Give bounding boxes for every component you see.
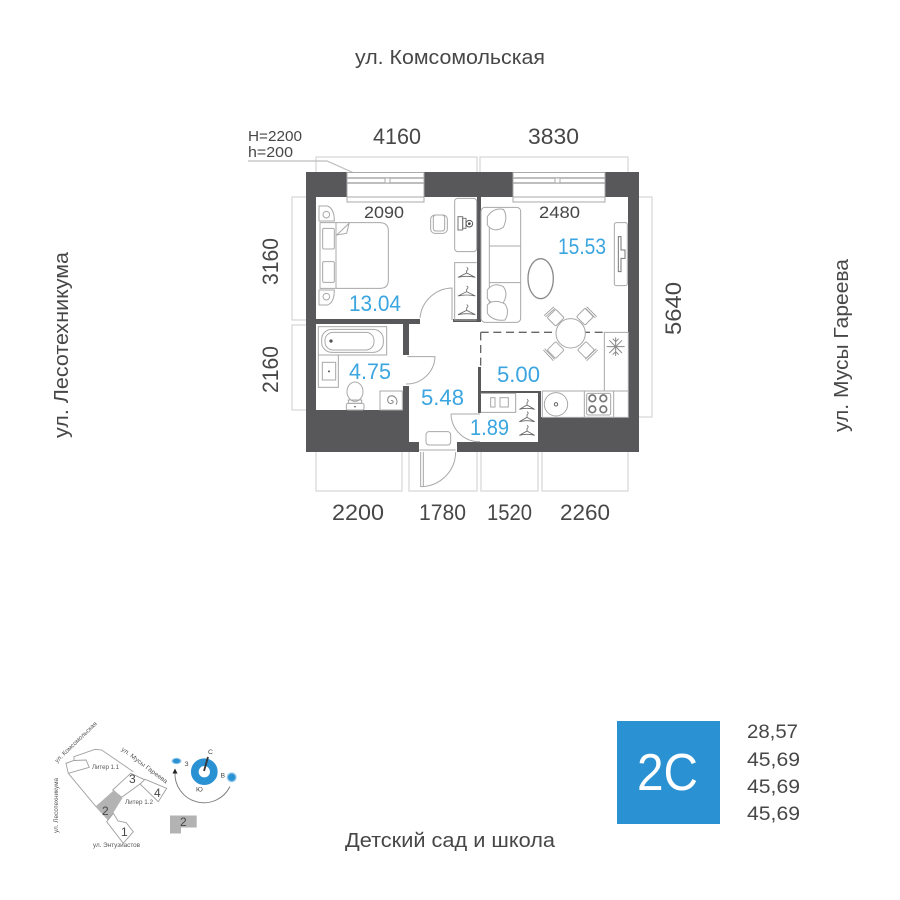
compass — [171, 749, 237, 803]
icon: bedroom door — [420, 288, 452, 320]
icon: bathroom door — [406, 357, 435, 384]
icon: hall shelf — [426, 432, 451, 445]
furniture: kitchen and closet — [451, 307, 628, 442]
dimension guide lines — [248, 157, 652, 491]
furniture: bathroom — [318, 327, 456, 487]
room areas: 15.53 — [558, 234, 606, 259]
icon: dashed zone boundary — [481, 332, 604, 367]
room areas: 5.48 — [421, 385, 464, 410]
site buildings — [66, 749, 167, 843]
icon: closet hangers — [519, 399, 535, 435]
area figures: 45,69 — [747, 804, 800, 825]
window height label: h=200 — [248, 144, 293, 161]
icon: sofa — [481, 207, 521, 322]
icon: bed — [319, 206, 388, 305]
site street labels: ул. Мусы Гареева — [120, 746, 169, 786]
icon: closet door — [451, 414, 480, 442]
area figures: 28,57 — [747, 722, 798, 743]
dimension labels: 1520 — [487, 500, 532, 525]
site street labels: ул. Лесотехникума — [53, 777, 60, 833]
compass: В — [220, 772, 226, 780]
icon: fridge — [604, 332, 628, 391]
dimension labels: 5640 — [661, 282, 686, 335]
floor marker: 2 — [180, 815, 187, 829]
site street labels — [53, 721, 169, 849]
window dimension labels: 2090 — [364, 203, 404, 222]
walls — [306, 172, 639, 452]
street label: bottom: Детский сад и школа — [345, 830, 556, 852]
dimension labels: 4160 — [373, 124, 421, 149]
icon: washing machine — [481, 393, 516, 412]
building numbers: 2 — [102, 804, 109, 818]
dimension labels: 2200 — [332, 500, 384, 525]
room areas: 1.89 — [470, 415, 509, 440]
room areas — [349, 234, 606, 440]
icon: desk — [455, 198, 477, 252]
icon: dining table and chairs — [543, 307, 598, 361]
window height label — [248, 128, 302, 161]
windows — [347, 172, 605, 202]
area figures: 45,69 — [747, 777, 800, 798]
icon: entrance door — [419, 450, 456, 487]
icon: boiler — [380, 391, 402, 410]
dimension labels — [258, 124, 686, 525]
building numbers — [102, 772, 161, 839]
dimension labels: 1780 — [419, 500, 466, 525]
icon: tv stand — [614, 223, 627, 286]
street label: top: ул. Комсомольская — [355, 47, 545, 69]
building numbers: 3 — [129, 772, 136, 786]
compass: Ю — [196, 786, 203, 794]
icon: bathtub — [318, 327, 387, 355]
compass: С — [208, 749, 213, 756]
icon: kitchen counter — [542, 391, 628, 417]
room areas: 5.00 — [497, 362, 540, 387]
icon: sink — [544, 393, 568, 416]
window height label: H=2200 — [248, 128, 302, 145]
area figures: 45,69 — [747, 750, 800, 771]
street label: right: ул. Мусы Гареева — [831, 258, 853, 432]
dimension labels: 2260 — [560, 500, 610, 525]
key plan — [53, 721, 237, 849]
site street labels: ул. Комсомольская — [54, 721, 99, 764]
floor marker — [170, 815, 197, 834]
window dimension labels: 2480 — [539, 203, 580, 222]
furniture: desk and wardrobe — [455, 198, 627, 322]
room areas: 13.04 — [349, 291, 401, 316]
apartment type badge — [617, 721, 720, 824]
building numbers: 1 — [121, 825, 128, 839]
dimension labels: 2160 — [258, 346, 283, 393]
street label: left: ул. Лесотехникума — [51, 251, 73, 438]
area figures — [747, 722, 800, 825]
room areas: 4.75 — [349, 359, 391, 384]
icon: toilet — [346, 382, 364, 410]
site street labels: ул. Энтузиастов — [93, 842, 141, 849]
window dimension labels — [364, 203, 580, 222]
dimension labels: 3830 — [528, 124, 579, 149]
icon: office chair — [431, 215, 447, 233]
compass: З — [184, 761, 189, 768]
icon: washbasin — [318, 355, 338, 387]
icon: oval rug table — [528, 259, 553, 299]
icon: stove — [584, 391, 614, 417]
site street labels: Литер 1.2 — [125, 799, 154, 806]
site street labels: Литер 1.1 — [92, 764, 120, 771]
building numbers: 4 — [154, 786, 161, 800]
furniture: bedroom — [319, 206, 447, 305]
dimension labels: 3160 — [258, 238, 283, 285]
icon: wardrobe — [455, 263, 477, 320]
apartment type badge: 2C — [637, 744, 698, 802]
